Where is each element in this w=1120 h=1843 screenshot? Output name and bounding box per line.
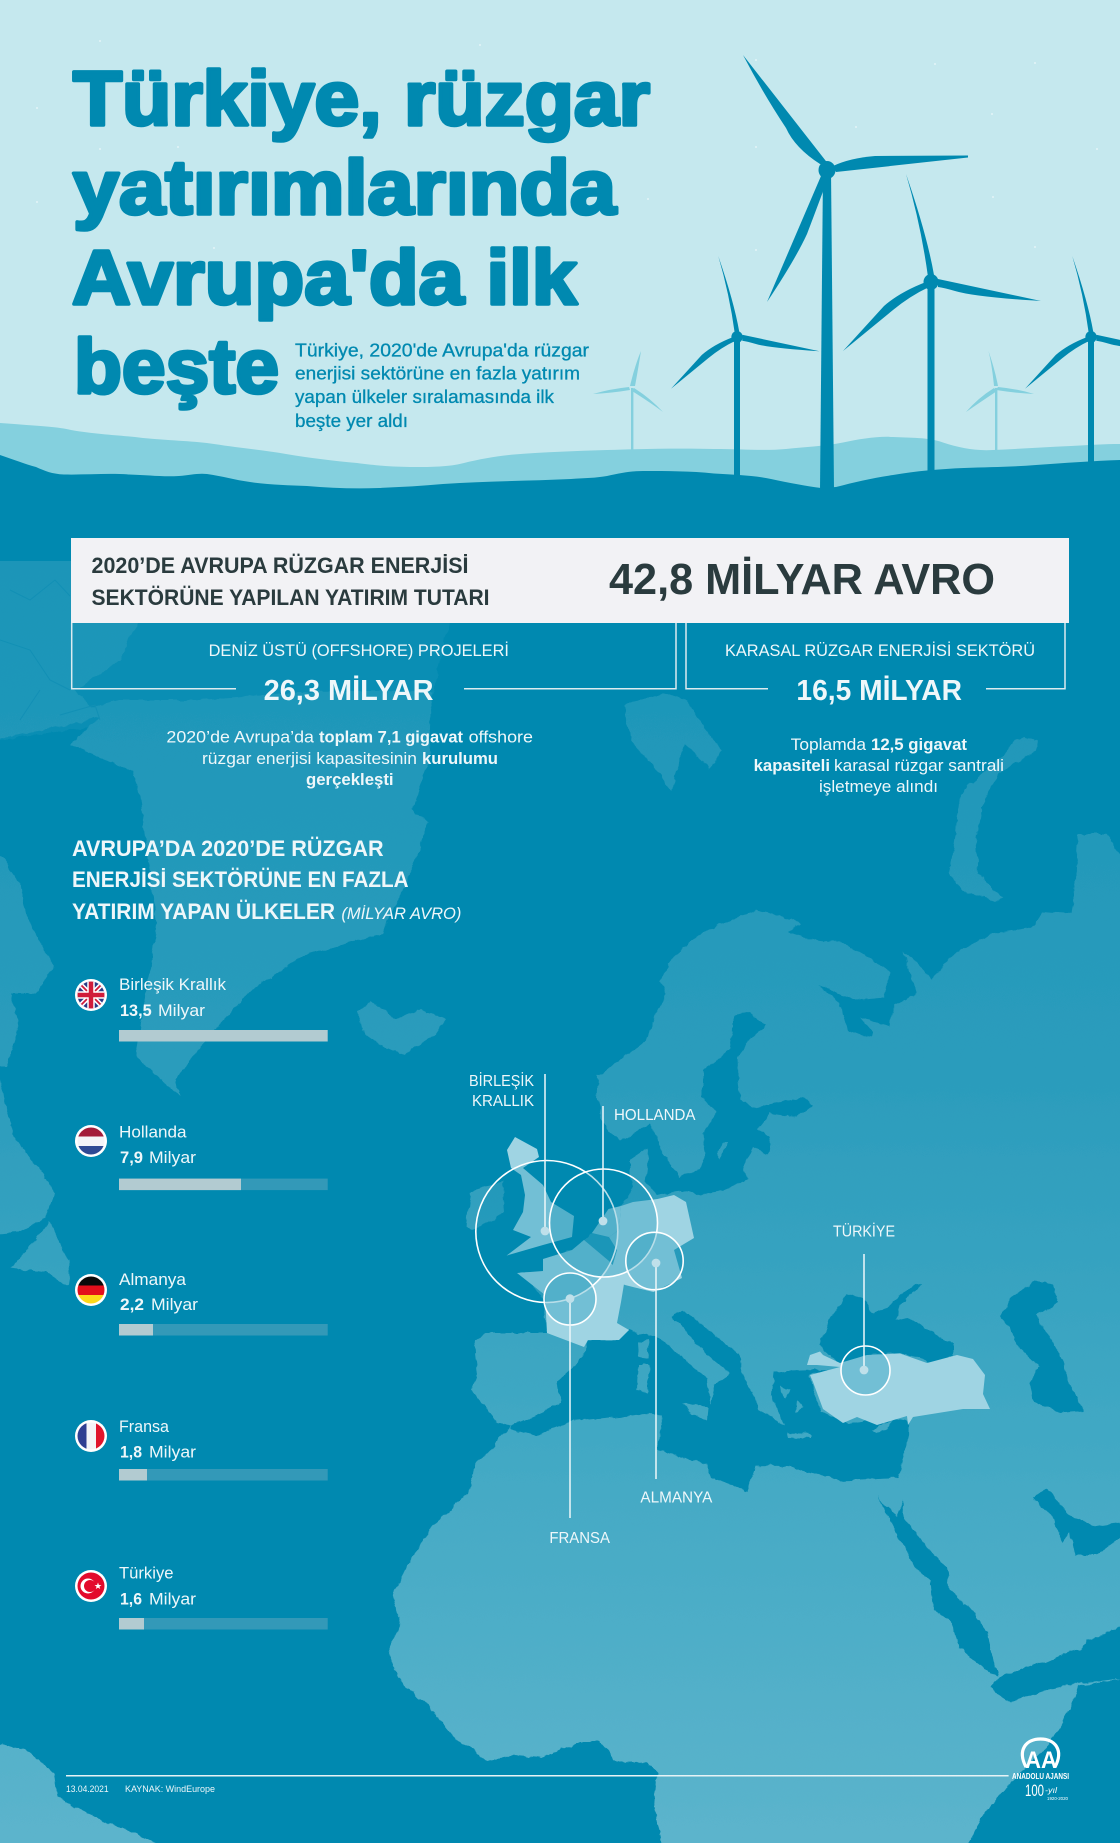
row: Fransa: Milyar bbox=[149, 1443, 196, 1462]
panel: onshore sector bbox=[686, 623, 1065, 796]
map marker: Almanya bbox=[626, 1232, 683, 1479]
subtitle: enerjisi sektörüne en fazla yatırım bbox=[295, 362, 580, 384]
sky specks bbox=[36, 40, 1098, 251]
footer line bbox=[66, 1775, 1009, 1776]
offshore description bbox=[166, 728, 533, 789]
row: Fransa: 1,8 bbox=[120, 1443, 142, 1462]
map labels: BİRLEŞİK bbox=[469, 1072, 535, 1090]
ranking heading: ENERJİSİ SEKTÖRÜNE EN FAZLA bbox=[72, 867, 409, 892]
title bbox=[72, 56, 650, 410]
panel: offshore projects: DENİZ ÜSTÜ (OFFSHORE) PROJELERİ bbox=[209, 641, 509, 660]
panel: onshore sector: 16,5 MİLYAR bbox=[796, 675, 962, 707]
highlighted country: UK bbox=[506, 1137, 574, 1256]
total investment banner: 2020’DE AVRUPA RÜZGAR ENERJİSİ bbox=[92, 553, 468, 578]
row: Fransa: Fransa bbox=[119, 1417, 170, 1436]
logo: Anadolu Ajansı bbox=[1012, 1739, 1069, 1801]
sea: Black Sea bbox=[820, 1284, 953, 1363]
land: Svalbard bbox=[624, 694, 721, 791]
row: Hollanda: Hollanda bbox=[119, 1122, 187, 1142]
land: Greenland bbox=[63, 691, 432, 1096]
land: Ellesmere and north-west bbox=[0, 550, 138, 738]
front hill and ocean background bbox=[0, 455, 1120, 1843]
row: Birleşik Krallık: Milyar bbox=[158, 1001, 205, 1020]
land: Eurasia and Africa bbox=[389, 834, 1120, 1843]
subtitle: beşte yer aldı bbox=[295, 410, 408, 431]
footer date and source bbox=[66, 1784, 215, 1794]
offshore description: kurulumu bbox=[422, 749, 498, 768]
logo: Anadolu Ajansı: 1920-2020 bbox=[1047, 1796, 1068, 1801]
land: Novaya Zemlya bbox=[949, 737, 1037, 901]
highlighted country: Netherlands bbox=[592, 1206, 621, 1237]
background map bbox=[0, 550, 1120, 1843]
row: Birleşik Krallık: Birleşik Krallık bbox=[119, 975, 226, 994]
ranking heading: YATIRIM YAPAN ÜLKELER bbox=[72, 899, 335, 924]
row: Türkiye: Milyar bbox=[149, 1590, 196, 1608]
row: Almanya: Milyar bbox=[151, 1295, 198, 1314]
ranking heading: (MİLYAR AVRO) bbox=[341, 904, 461, 923]
footer date and source: KAYNAK: WindEurope bbox=[125, 1784, 215, 1794]
highlighted country: France bbox=[517, 1240, 629, 1347]
row: Hollanda: Milyar bbox=[149, 1148, 196, 1167]
title: yatırımlarında bbox=[73, 145, 617, 231]
total investment banner bbox=[71, 538, 1069, 623]
land: Baffin and Labrador bbox=[0, 855, 70, 1286]
main turbine bbox=[743, 55, 968, 490]
row: Birleşik Krallık: 13,5 bbox=[120, 1001, 152, 1020]
map marker: Fransa bbox=[544, 1273, 596, 1518]
row: Hollanda: 7,9 bbox=[120, 1148, 143, 1167]
faint distant turbine right bbox=[966, 351, 1034, 450]
sea: Red Sea bbox=[878, 1496, 998, 1677]
map labels: KRALLIK bbox=[472, 1093, 535, 1110]
map labels bbox=[469, 1072, 895, 1547]
land: South America bbox=[0, 1745, 171, 1843]
total investment banner: 42,8 MİLYAR AVRO bbox=[609, 555, 995, 604]
offshore description: toplam 7,1 gigavat bbox=[319, 728, 463, 747]
sea: Mediterranean bbox=[511, 1309, 909, 1491]
row: Fransa bbox=[75, 1417, 328, 1480]
logo: Anadolu Ajansı: -yıl bbox=[1045, 1786, 1057, 1795]
land: Iceland bbox=[357, 1001, 446, 1055]
row: Hollanda bbox=[75, 1122, 328, 1190]
offshore description: gerçekleşti bbox=[306, 770, 394, 789]
panel: offshore projects bbox=[72, 623, 676, 789]
offshore description: rüzgar enerjisi kapasitesinin bbox=[202, 749, 417, 768]
map marker: Birleşik Krallık bbox=[476, 1074, 618, 1302]
onshore description: 12,5 gigavat bbox=[871, 735, 967, 754]
onshore description bbox=[754, 735, 1004, 796]
row: Birleşik Krallık bbox=[75, 975, 328, 1042]
map labels: FRANSA bbox=[549, 1530, 611, 1547]
logo: Anadolu Ajansı: AA bbox=[1025, 1747, 1057, 1774]
map labels: HOLLANDA bbox=[614, 1107, 696, 1124]
bar chart: top investing countries bbox=[75, 975, 328, 1630]
logo: Anadolu Ajansı: 100 bbox=[1025, 1781, 1044, 1800]
onshore description: karasal rüzgar santrali bbox=[834, 756, 1004, 775]
highlighted country: Germany bbox=[609, 1195, 694, 1292]
sea: Persian Gulf bbox=[1032, 1488, 1120, 1555]
highlighted country: Türkiye bbox=[807, 1352, 990, 1425]
onshore description: işletmeye alındı bbox=[819, 777, 938, 796]
sea: Gulf of Aden bbox=[990, 1623, 1120, 1702]
title: beşte bbox=[74, 324, 279, 410]
background hill bbox=[0, 423, 1120, 540]
row: Türkiye: 1,6 bbox=[120, 1590, 142, 1608]
title: Avrupa'da ilk bbox=[72, 235, 577, 321]
row: Türkiye: Türkiye bbox=[119, 1564, 174, 1582]
land: Ireland bbox=[466, 1182, 504, 1231]
row: Almanya bbox=[75, 1270, 328, 1336]
ranking heading: AVRUPA’DA 2020’DE RÜZGAR bbox=[72, 836, 384, 861]
offshore description: offshore bbox=[469, 728, 533, 747]
map labels: ALMANYA bbox=[640, 1490, 713, 1506]
ranking heading bbox=[72, 836, 461, 924]
turbine medium bbox=[843, 174, 1041, 474]
map marker: Türkiye bbox=[841, 1254, 890, 1395]
land channels in the far north bbox=[0, 580, 100, 720]
land: far north faint area bbox=[0, 623, 450, 740]
offshore description: 2020’de Avrupa’da bbox=[166, 728, 315, 747]
faint distant turbine left bbox=[593, 351, 663, 451]
panel: offshore projects: 26,3 MİLYAR bbox=[264, 675, 434, 707]
title: Türkiye, rüzgar bbox=[73, 56, 650, 142]
map labels: TÜRKİYE bbox=[833, 1223, 895, 1241]
row: Almanya: 2,2 bbox=[120, 1295, 144, 1314]
turbine small left bbox=[671, 256, 820, 477]
islands bbox=[637, 1143, 893, 1438]
subtitle: yapan ülkeler sıralamasında ilk bbox=[295, 386, 555, 407]
sky background bbox=[0, 0, 1120, 520]
subtitle bbox=[295, 339, 589, 431]
footer date and source: 13.04.2021 bbox=[66, 1784, 109, 1794]
turbine small right bbox=[1025, 256, 1120, 463]
row: Almanya: Almanya bbox=[119, 1270, 187, 1289]
logo: Anadolu Ajansı: ANADOLU AJANSI bbox=[1012, 1771, 1069, 1781]
subtitle: Türkiye, 2020'de Avrupa'da rüzgar bbox=[295, 339, 589, 360]
map marker: Hollanda bbox=[550, 1106, 658, 1277]
total investment banner: SEKTÖRÜNE YAPILAN YATIRIM TUTARI bbox=[92, 585, 490, 610]
sea: Caspian bbox=[1000, 1282, 1083, 1413]
panel: onshore sector: KARASAL RÜZGAR ENERJİSİ SEKTÖRÜ bbox=[725, 641, 1035, 660]
onshore description: kapasiteli bbox=[754, 756, 830, 775]
row: Türkiye bbox=[75, 1564, 328, 1630]
onshore description: Toplamda bbox=[791, 735, 867, 754]
